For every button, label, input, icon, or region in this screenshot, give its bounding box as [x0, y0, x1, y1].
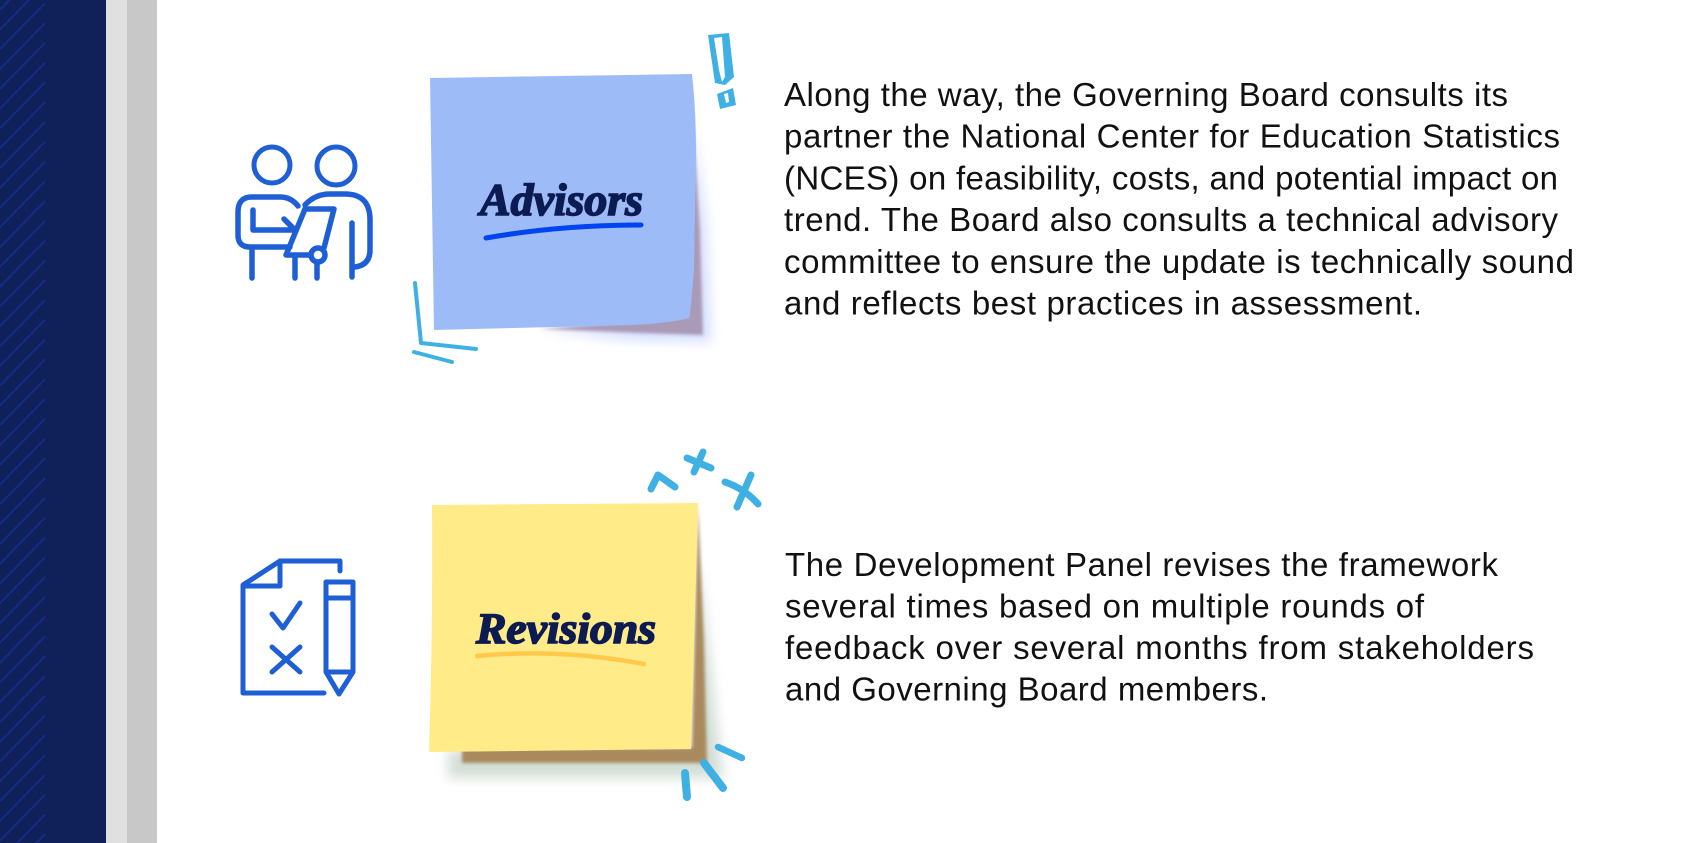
text: advisors description: Along the way, the Governing Board consults its [784, 76, 1508, 113]
panel: revisions [243, 452, 1534, 797]
decoration: burst rays [685, 747, 742, 797]
heading: Revisions: Revisions [475, 606, 656, 653]
decoration: caret and crosses [651, 452, 758, 507]
text: advisors description: committee to ensure the update is technically sound [784, 243, 1574, 280]
decoration: exclamation mark [708, 33, 736, 109]
text: revisions description: several times based on multiple rounds of [785, 588, 1425, 624]
underline: Advisors [486, 225, 641, 238]
panel: advisors [238, 33, 1574, 362]
heading: Advisors: Advisors [477, 175, 643, 225]
text: advisors description: partner the National Center for Education Statistics [784, 118, 1560, 155]
text: revisions description: feedback over several months from stakeholders [785, 629, 1534, 666]
text: revisions description: and Governing Board members. [785, 670, 1268, 707]
text: advisors description: trend. The Board also consults a technical advisory [784, 201, 1558, 238]
icon: checklist document and pencil [243, 561, 353, 694]
text: advisors description [784, 76, 1574, 322]
sticky note: advisors [430, 74, 711, 342]
underline: Revisions [477, 653, 644, 664]
text: advisors description: (NCES) on feasibility, costs, and potential impact on [784, 159, 1558, 196]
sticky note: revisions [429, 503, 726, 778]
text: revisions description: The Development Panel revises the framework [785, 546, 1498, 583]
icon: two people with clipboard [238, 147, 370, 278]
text: advisors description: and reflects best practices in assessment. [784, 284, 1422, 322]
left decorative sidebar [0, 0, 157, 843]
text: revisions description [785, 546, 1534, 707]
decoration: corner marks [414, 283, 476, 362]
